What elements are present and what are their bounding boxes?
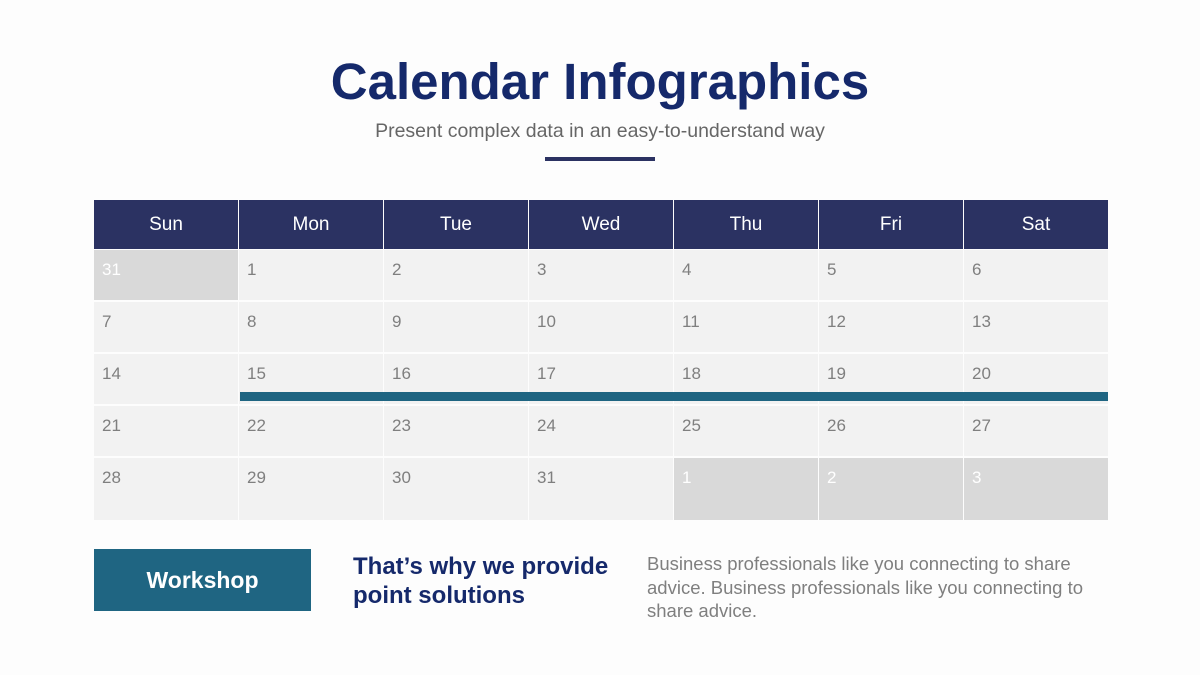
calendar: 26 <box>827 416 846 435</box>
calendar: 11 <box>682 312 700 331</box>
heading: That’s why we provide <box>353 553 608 580</box>
calendar: 12 <box>827 312 846 331</box>
calendar: 1 <box>682 468 691 487</box>
calendar: 3 <box>972 468 981 487</box>
calendar: 7 <box>102 312 111 331</box>
calendar: Fri <box>880 214 902 235</box>
calendar: 29 <box>247 468 266 487</box>
calendar: Tue <box>440 214 472 235</box>
workshop label <box>94 549 311 611</box>
event bar <box>240 392 1108 401</box>
calendar: 19 <box>827 364 846 383</box>
calendar: 22 <box>247 416 266 435</box>
divider <box>545 157 655 161</box>
calendar: 20 <box>972 364 991 383</box>
calendar: 30 <box>392 468 411 487</box>
calendar: 25 <box>682 416 701 435</box>
calendar: 3 <box>537 260 546 279</box>
calendar: 5 <box>827 260 836 279</box>
calendar: 16 <box>392 364 411 383</box>
calendar: 4 <box>682 260 691 279</box>
calendar: 24 <box>537 416 556 435</box>
calendar: 8 <box>247 312 256 331</box>
calendar: 18 <box>682 364 701 383</box>
calendar: Sat <box>1022 214 1050 235</box>
calendar: 21 <box>102 416 121 435</box>
calendar: 14 <box>102 364 121 383</box>
calendar: Wed <box>582 214 620 235</box>
body text: Business professionals like you connecting to share advice. Business professionals like you connecting to share advice. <box>647 553 1083 621</box>
calendar: Mon <box>293 214 329 235</box>
calendar: 2 <box>827 468 836 487</box>
calendar: 10 <box>537 312 556 331</box>
calendar: Sun <box>149 214 183 235</box>
calendar: Thu <box>730 214 762 235</box>
title: Calendar Infographics <box>331 53 869 110</box>
calendar: 13 <box>972 312 991 331</box>
workshop label: Workshop <box>146 567 259 593</box>
calendar: 6 <box>972 260 981 279</box>
calendar: 1 <box>247 260 256 279</box>
heading: point solutions <box>353 582 525 609</box>
calendar: 31 <box>102 260 121 279</box>
heading <box>353 553 608 609</box>
calendar: 2 <box>392 260 401 279</box>
subtitle: Present complex data in an easy-to-understand way <box>375 120 825 142</box>
calendar: 9 <box>392 312 401 331</box>
calendar: 17 <box>537 364 556 383</box>
calendar: 23 <box>392 416 411 435</box>
calendar: 28 <box>102 468 121 487</box>
calendar: 27 <box>972 416 991 435</box>
calendar: 31 <box>537 468 556 487</box>
calendar: 15 <box>247 364 266 383</box>
calendar <box>94 200 1108 520</box>
